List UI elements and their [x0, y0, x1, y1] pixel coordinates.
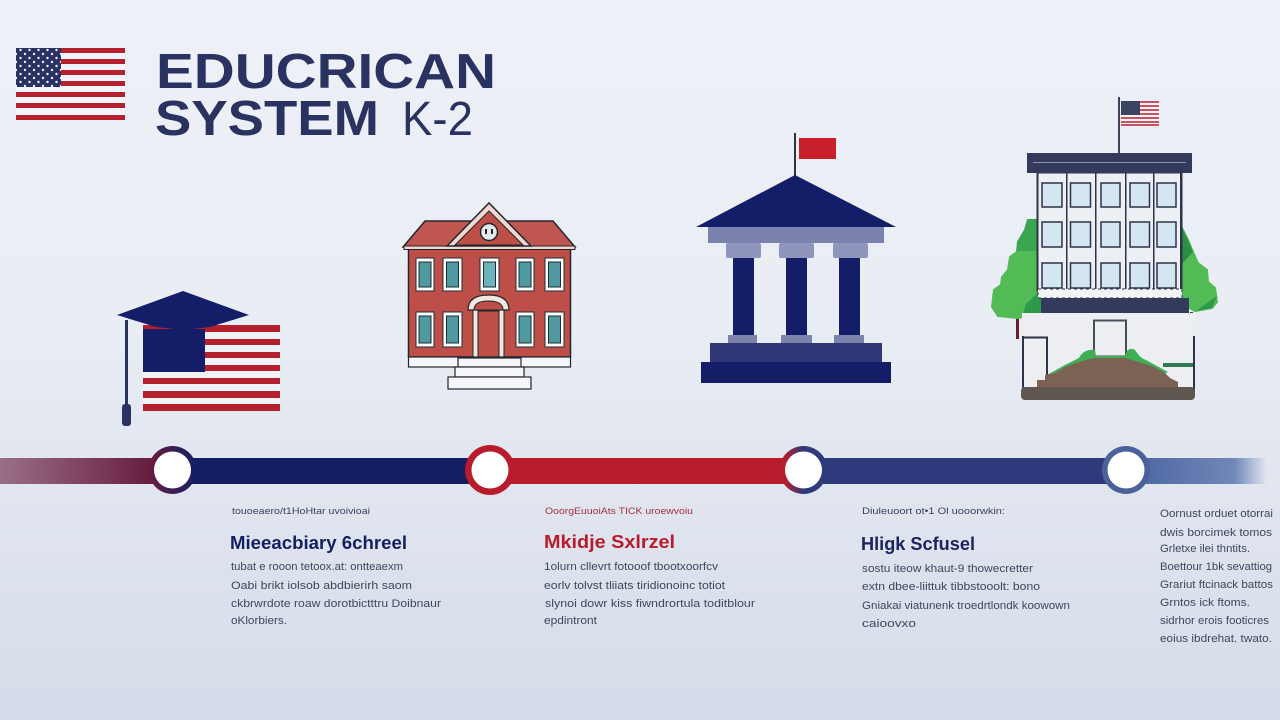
milestone 2 [465, 445, 515, 495]
capitals [726, 243, 868, 258]
steps [701, 343, 891, 383]
description: slynoi dowr kiss fiwndrortula toditblour [545, 598, 755, 610]
trees [992, 220, 1217, 339]
column: right text block [1160, 508, 1274, 645]
description: extn dbee-liittuk tibbstooolt: bono [862, 581, 1040, 593]
walls [408, 249, 570, 357]
description [544, 561, 755, 627]
icon: American flag [16, 48, 125, 120]
windows [1042, 183, 1176, 288]
entablature [708, 227, 884, 243]
column: right text block: Grletxe ilei thntits. [1160, 543, 1250, 555]
description: caioovxo [862, 618, 916, 630]
icon: elementary school building [403, 203, 575, 389]
description: Oabi brikt iolsob abdbierirh saom [231, 580, 412, 592]
caption: OoorgEuuoiAts TICK uroewvoiu [545, 506, 693, 517]
column: right text block: sidrhor erois footicres [1160, 615, 1270, 627]
tassel [122, 320, 131, 426]
caption: Diuleuoort ot•1 Ol uooorwkin: [862, 506, 1005, 517]
columns [733, 258, 860, 335]
description: 1olurn cllevrt fotooof tbootxoorfcv [544, 561, 719, 573]
caption: touoeaero/t1HoHtar uvoivioai [232, 506, 370, 517]
milestone 4 [1102, 446, 1150, 494]
description [231, 561, 441, 627]
upper floors [1037, 173, 1182, 291]
title: EDUCRICAN [156, 45, 496, 99]
flag [794, 133, 836, 176]
balcony band [1041, 298, 1189, 313]
cap base [143, 329, 205, 372]
timeline [0, 445, 1266, 495]
milestone 3 [780, 446, 828, 494]
roof [1027, 153, 1192, 173]
pediment [696, 175, 896, 227]
title: SYSTEM [155, 92, 379, 146]
upper windows [416, 258, 564, 291]
door and portico [468, 295, 509, 357]
description: epdintront [544, 615, 597, 627]
description: ckbrwrdote roaw dorotbictttru Doibnaur [231, 598, 441, 610]
flag stripes [143, 325, 280, 411]
icon: columned temple with red flag [696, 133, 896, 383]
foundation and steps [408, 357, 570, 389]
column: high school [861, 506, 1070, 630]
column: middle school [544, 506, 755, 627]
column: elementary school [230, 506, 441, 627]
flag [1118, 97, 1159, 154]
column: right text block: Boettour 1bk sevattiog [1160, 561, 1272, 573]
description: eorlv tolvst tliiats tiridionoinc totiot [544, 580, 725, 592]
description: oKlorbiers. [231, 615, 287, 627]
heading: Hligk Scfusel [861, 534, 975, 554]
balcony railing [1038, 289, 1182, 298]
title [155, 45, 496, 146]
heading: Mieeacbiary 6chreel [230, 533, 407, 553]
column bases [728, 335, 864, 343]
milestone 1 [148, 446, 196, 494]
icon: high school building [992, 97, 1217, 400]
column: right text block: dwis borcimek tomos [1160, 527, 1273, 539]
vertical pillars [1036, 173, 1182, 291]
description [862, 563, 1070, 630]
description: sostu iteow khaut-9 thowecretter [862, 563, 1033, 575]
ground floor [1022, 313, 1195, 391]
description: Gniakai viatunenk troedrtlondk koowown [862, 600, 1070, 612]
title: K-2 [402, 93, 473, 146]
mortarboard [117, 291, 249, 330]
description: tubat e rooon tetoox.at: ontteaexm [231, 561, 403, 573]
column: right text block: Oornust orduet otorrai [1160, 508, 1273, 520]
lower windows [416, 312, 564, 347]
timeline bar segments [0, 458, 1266, 484]
roof [403, 221, 575, 247]
column: right text block: eoius ibdrehat. twato. [1160, 633, 1272, 645]
gable [447, 203, 531, 246]
column: right text block: Grntos ick ftoms. [1160, 597, 1250, 609]
hill and steps [1021, 349, 1195, 400]
icon: graduation cap with flag [117, 291, 280, 426]
heading: Mkidje Sxlrzel [544, 532, 675, 552]
column: right text block: Grariut ftcinack battos [1160, 579, 1274, 591]
